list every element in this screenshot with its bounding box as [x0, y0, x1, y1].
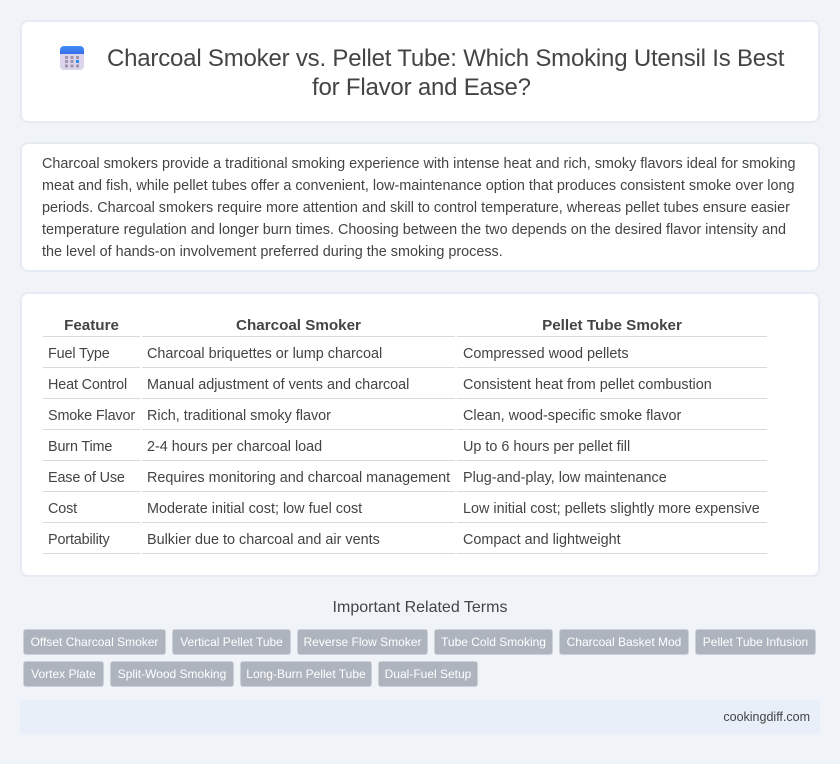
heading: related terms: Important Related Terms [333, 599, 507, 616]
summary text: the level of hands-on involvement preferred during the smoking process. [42, 244, 503, 260]
panel: summary card [20, 142, 820, 272]
related term tags: Reverse Flow Smoker [303, 635, 422, 649]
panel: title card [20, 20, 820, 123]
related term tags: Vertical Pellet Tube [180, 635, 283, 649]
title: Charcoal Smoker vs. Pellet Tube: Which Smoking Utensil Is Best [107, 45, 784, 72]
comparison table: 2-4 hours per charcoal load [147, 439, 322, 455]
related term tags: Charcoal Basket Mod [567, 635, 681, 649]
summary text: temperature regulation and longer burn times. Choosing between the two depends on the desired flavor intensity and [42, 222, 786, 238]
related term tags: Pellet Tube Infusion [703, 635, 808, 649]
title: for Flavor and Ease? [312, 74, 531, 101]
comparison table: Fuel Type [48, 346, 110, 362]
comparison table: Low initial cost; pellets slightly more expensive [463, 501, 760, 517]
comparison table [43, 317, 767, 554]
comparison table: Compact and lightweight [463, 532, 621, 548]
summary text [42, 156, 795, 260]
comparison table: Feature [64, 317, 119, 334]
panel: comparison table card [20, 292, 820, 577]
related term tags: Offset Charcoal Smoker [31, 635, 158, 649]
comparison table: Heat Control [48, 377, 127, 393]
summary text: Charcoal smokers provide a traditional smoking experience with intense heat and rich, smoky flavors ideal for smoking [42, 156, 795, 172]
related term tags [23, 629, 816, 687]
footer bar [20, 700, 820, 734]
comparison table: Charcoal briquettes or lump charcoal [147, 346, 382, 362]
comparison table: Requires monitoring and charcoal management [147, 470, 450, 486]
comparison table: Manual adjustment of vents and charcoal [147, 377, 409, 393]
comparison table: Ease of Use [48, 470, 125, 486]
comparison table: Up to 6 hours per pellet fill [463, 439, 630, 455]
summary text: meat and fish, while pellet tubes offer a convenient, low-maintenance option that produces consistent smoke over long [42, 178, 794, 194]
comparison table: Compressed wood pellets [463, 346, 629, 362]
comparison table: Charcoal Smoker [236, 317, 361, 334]
comparison table: Clean, wood-specific smoke flavor [463, 408, 681, 424]
comparison table: Smoke Flavor [48, 408, 135, 424]
comparison table: Burn Time [48, 439, 112, 455]
title [107, 45, 784, 101]
footer source text: cookingdiff.com [723, 710, 810, 724]
comparison table: Portability [48, 532, 110, 548]
icon: calendar [60, 46, 84, 70]
related term tags: Tube Cold Smoking [441, 635, 546, 649]
comparison table: Plug-and-play, low maintenance [463, 470, 667, 486]
related term tags: Dual-Fuel Setup [385, 667, 471, 681]
comparison table: Consistent heat from pellet combustion [463, 377, 712, 393]
related term tags: Long-Burn Pellet Tube [246, 667, 366, 681]
comparison table: Rich, traditional smoky flavor [147, 408, 331, 424]
comparison table: Pellet Tube Smoker [542, 317, 682, 334]
related term tags: Vortex Plate [31, 667, 96, 681]
related term tags: Split-Wood Smoking [118, 667, 226, 681]
comparison table: Cost [48, 501, 77, 517]
comparison table: Bulkier due to charcoal and air vents [147, 532, 380, 548]
summary text: periods. Charcoal smokers require more attention and skill to control temperature, whereas pellet tubes ensure easier [42, 200, 790, 216]
comparison table: Moderate initial cost; low fuel cost [147, 501, 362, 517]
